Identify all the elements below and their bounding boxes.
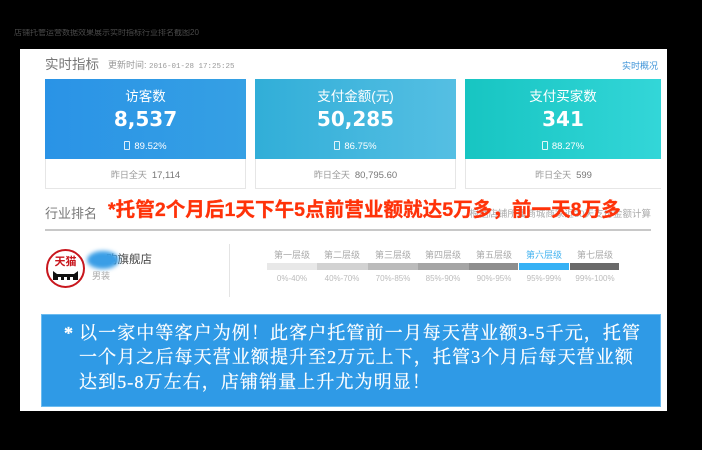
card header: visitors: 访客数 (125, 89, 166, 104)
card header: buyers (465, 79, 661, 159)
card header: buyers: 支付买家数 (529, 89, 597, 104)
panel: dashboard (20, 49, 667, 411)
card header: visitors: 8,537 (114, 107, 177, 131)
tier chart: 95%-99% (527, 274, 561, 283)
yesterday buyers: 昨日全天 599 (535, 170, 592, 181)
callout line 3: 达到5-8万左右，店铺销量上升尤为明显！ (79, 372, 431, 392)
update time: 更新时间: 2016-01-28 17:25:25 (108, 60, 235, 71)
tier chart: 40%-70% (325, 274, 359, 283)
tier chart: 90%-95% (477, 274, 511, 283)
callout line 1: 以一家中等客户为例！此客户托管前一月每天营业额3-5千元，托管 (79, 323, 641, 343)
yesterday payment: 昨日全天 80,795.60 (314, 170, 397, 181)
callout asterisk: * (64, 323, 74, 343)
card header: visitors: 89.52% (134, 141, 167, 152)
card header: payment amount: 支付金额(元) (317, 89, 394, 104)
store name: 购旗舰店 (106, 254, 152, 266)
card header: payment amount: 50,285 (317, 107, 394, 131)
tier percentages: 0%-40% (277, 274, 307, 283)
card: visitors (45, 79, 246, 189)
red headline: *托管2个月后1天下午5点前营业额就达5万多，前一天8万多 (108, 199, 621, 221)
tier bars (267, 263, 317, 270)
icon: tmall logo (46, 249, 85, 288)
tier labels: 第一层级 (274, 250, 310, 260)
callout (41, 314, 661, 407)
card header: buyers: 88.27% (552, 141, 584, 152)
heading: realtime metrics: 实时指标 (45, 57, 99, 72)
callout line 2: 一个月之后每天营业额提升至2万元上下，托管3个月后每天营业额 (79, 347, 634, 367)
tier chart: 第四层级 (425, 250, 461, 260)
yesterday visitors: 昨日全天 17,114 (111, 170, 180, 181)
card header: payment amount: 86.75% (344, 141, 377, 152)
card: buyers (465, 79, 661, 189)
faded note: 根据店铺所属商城商家近30天支付金额计算 (469, 209, 651, 220)
tier chart: 第七层级 (577, 250, 613, 260)
card: payment amount (255, 79, 456, 189)
card header: visitors (45, 79, 246, 159)
tier chart: 85%-90% (426, 274, 460, 283)
heading: industry rank: 行业排名 (45, 206, 97, 221)
card header: buyers: 341 (542, 107, 584, 131)
tier chart: 第三层级 (375, 250, 411, 260)
logo text: 天猫 (54, 256, 76, 268)
tier chart: 第二层级 (324, 250, 360, 260)
link: realtime overview: 实时概况 (622, 61, 658, 71)
logo cat (53, 271, 78, 280)
tier chart: 99%-100% (575, 274, 615, 283)
tier chart: 70%-85% (376, 274, 410, 283)
rule (45, 229, 651, 231)
vertical divider (229, 244, 230, 297)
card header: payment amount (255, 79, 456, 159)
blurred name mask (87, 251, 119, 269)
tier chart: 第六层级 (526, 250, 562, 260)
tier chart: 第五层级 (476, 250, 512, 260)
store category: 男装 (92, 271, 110, 281)
